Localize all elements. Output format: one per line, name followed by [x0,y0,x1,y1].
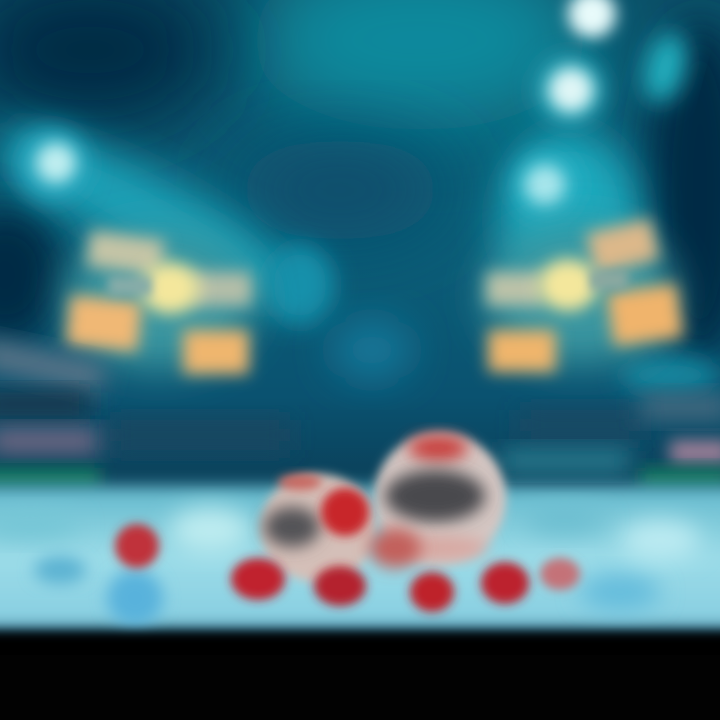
helmet: small [260,474,376,582]
ball: far right [540,558,580,590]
scoreboard: left [65,230,255,374]
light: upper right [536,56,604,124]
stands: left [0,338,290,488]
ball: front 4 [481,562,529,604]
ball: far left [115,524,159,568]
light: top right [568,0,616,38]
ball: front 3 [410,572,454,612]
light: teal panel [636,28,694,108]
light: left [16,129,88,201]
ball: front 1 [231,558,285,600]
stands: right [500,395,720,488]
black foreground band [0,632,720,720]
ball: front 2 [314,566,366,606]
light: middle right [513,153,577,217]
helmet: large [374,432,506,564]
scoreboard: right [485,218,683,372]
swimming pool water [0,486,720,628]
stadium lights [16,0,694,217]
red balls [115,524,580,612]
